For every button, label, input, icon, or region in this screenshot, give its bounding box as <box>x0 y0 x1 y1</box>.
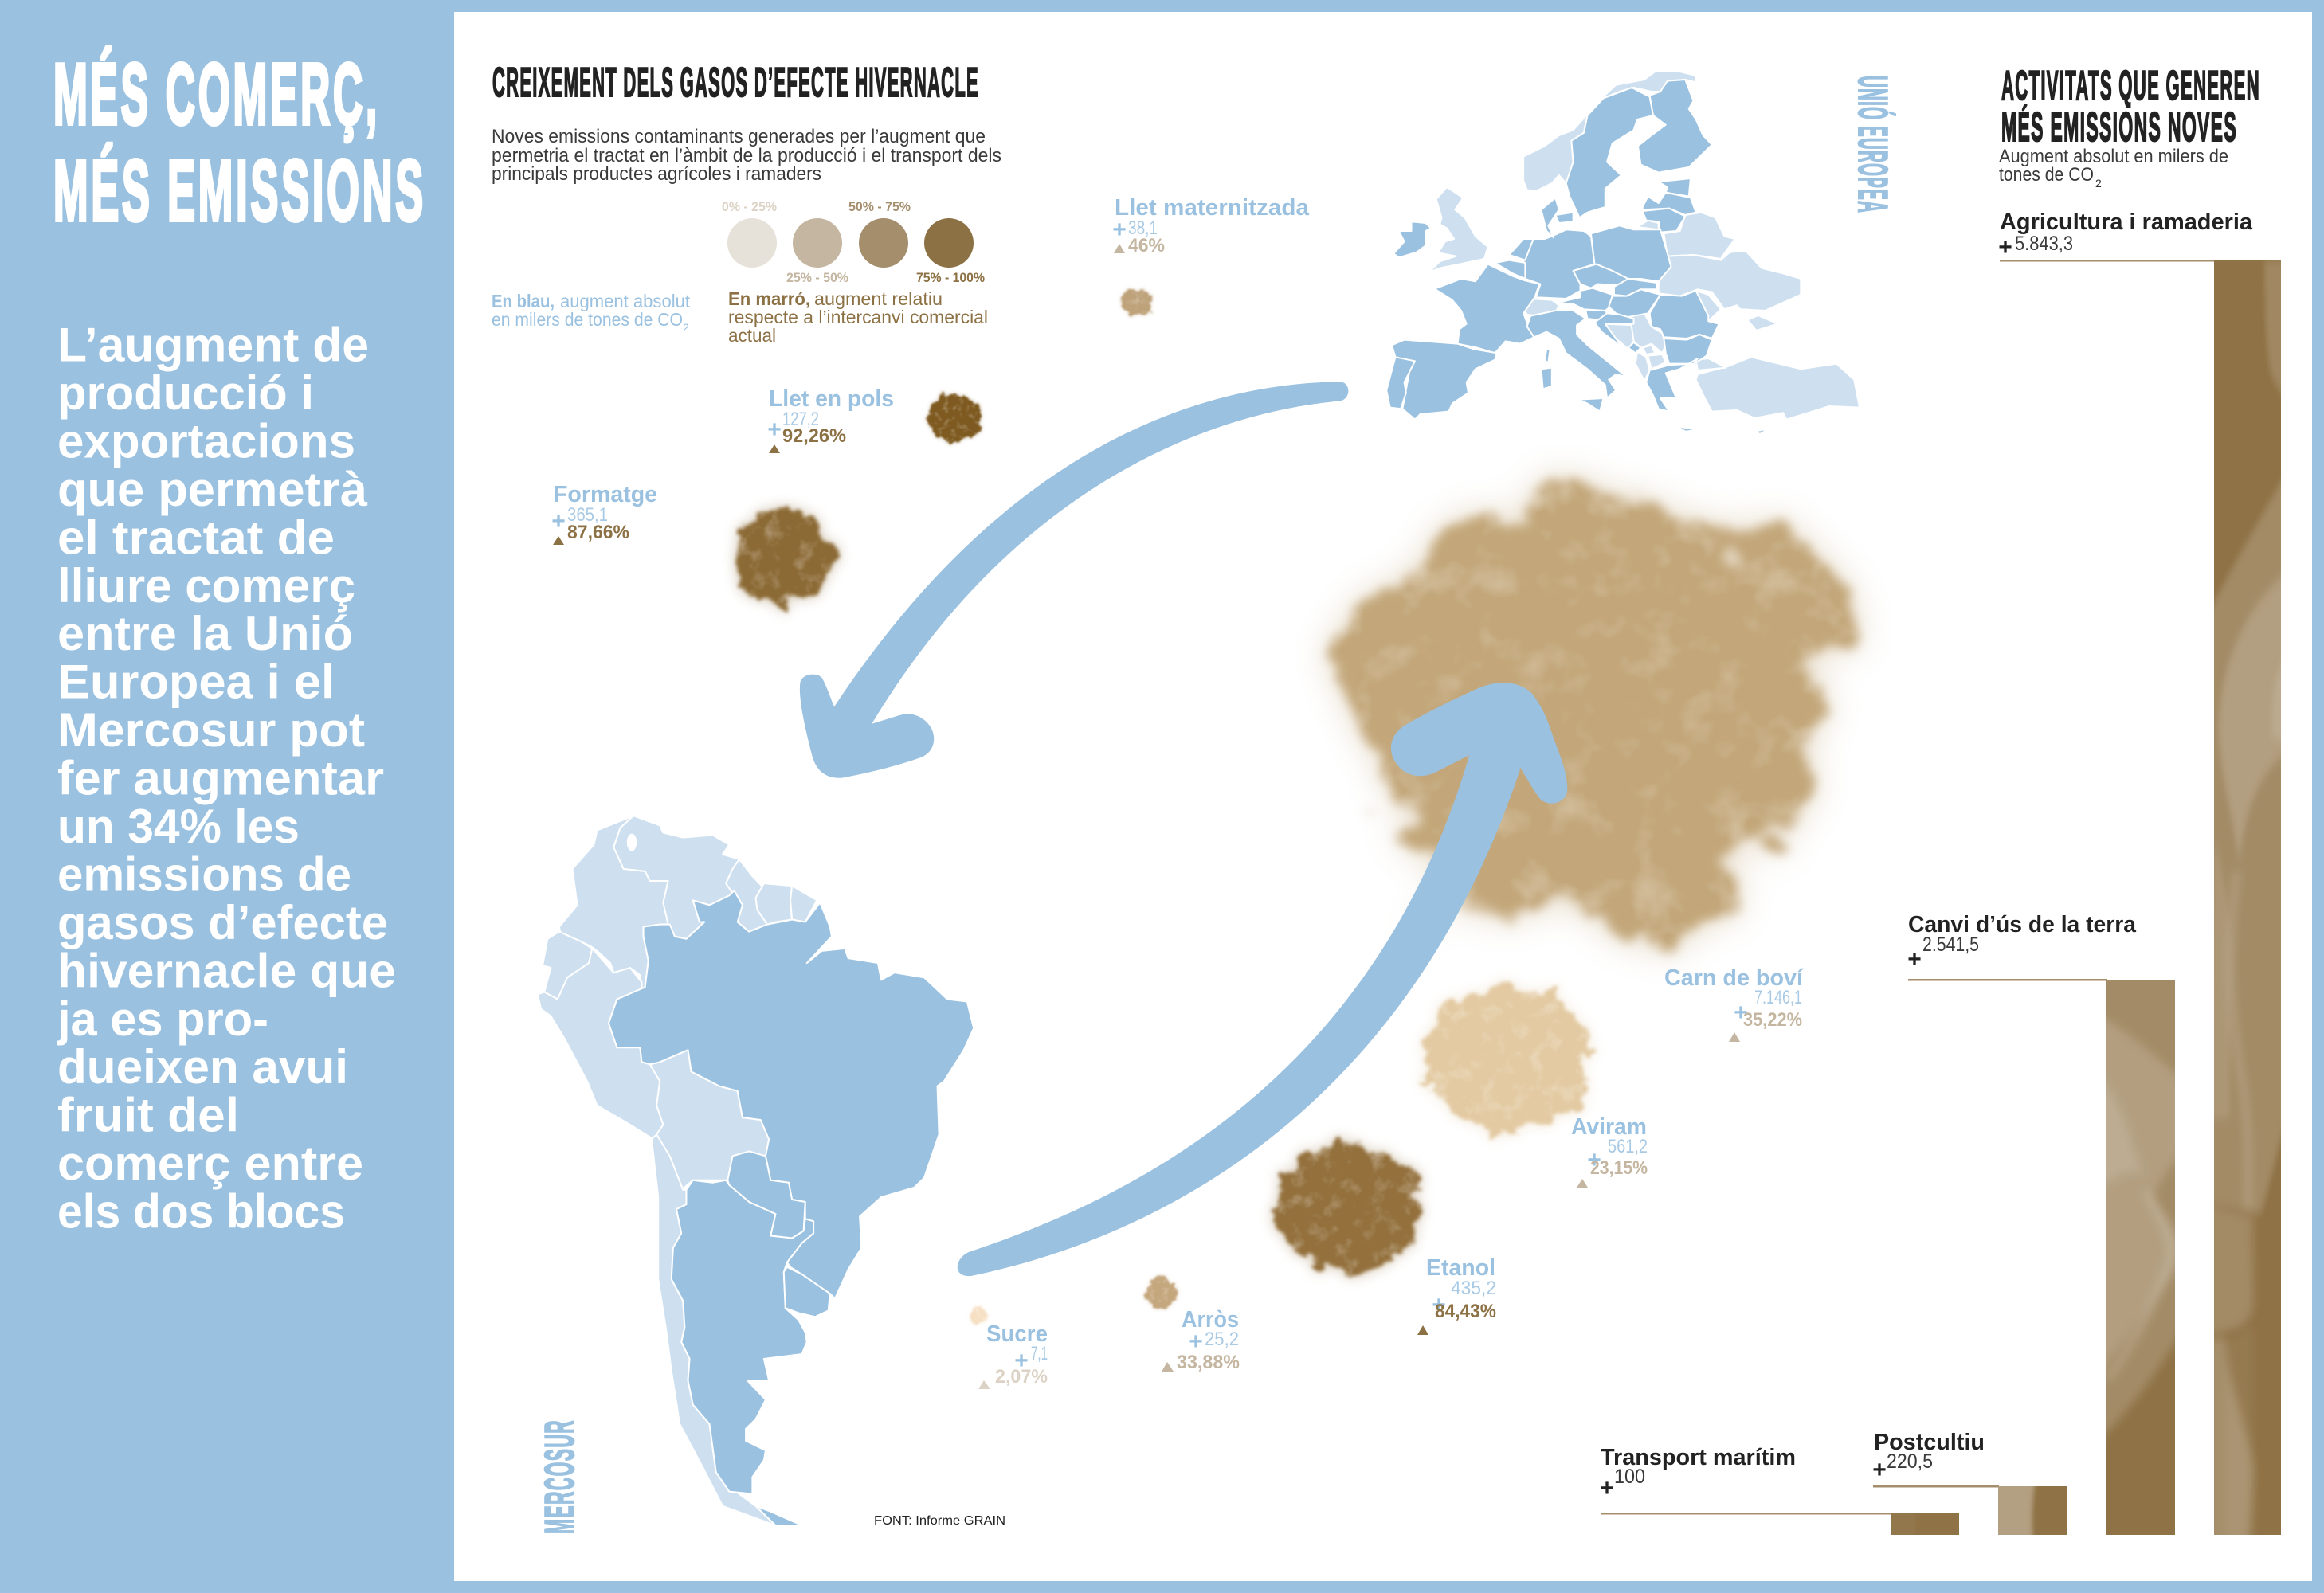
product label: Formatge: 365,1 <box>567 504 608 526</box>
intro paragraph: hivernacle que <box>57 944 396 997</box>
product label: Llet maternitzada <box>1112 195 1310 256</box>
emission cloud: Aviram <box>1426 986 1590 1133</box>
right subheading <box>1999 146 2228 190</box>
bar: Postcultiu: Postcultiu <box>1874 1430 1985 1455</box>
product label: Llet maternitzada: Llet maternitzada <box>1115 195 1310 221</box>
legend note: brown: actual <box>728 325 776 346</box>
bar: Postcultiu: + <box>1872 1457 1887 1483</box>
bar: Agricultura i ramaderia <box>1998 209 2289 1544</box>
product label: Aviram: 23,15% <box>1590 1157 1648 1179</box>
bar: Transport marítim: 100 <box>1614 1466 1645 1488</box>
intro paragraph: dueixen avui <box>57 1040 348 1094</box>
product label: Carn de boví: 7.146,1 <box>1754 987 1802 1008</box>
product label: Etanol: + <box>1432 1292 1446 1318</box>
product label: Formatge <box>551 482 657 545</box>
intro paragraph: gasos d’efecte <box>57 896 388 949</box>
bar: Canvi d'ús de la terra: + <box>1907 946 1922 973</box>
intro paragraph: Europea i el <box>57 656 335 709</box>
legend note: brown: augment relatiu <box>814 288 943 309</box>
legend note: brown: En marró, <box>728 288 810 309</box>
bar: Canvi d'ús de la terra: Canvi d’ús de la terra <box>1908 912 2137 937</box>
product label: Llet en pols: 127,2 <box>782 409 819 430</box>
emission cloud: Carn de boví <box>1334 494 1840 936</box>
product label: Aviram: 561,2 <box>1608 1136 1648 1157</box>
bar: Postcultiu: 220,5 <box>1887 1450 1933 1473</box>
product label: Formatge: + <box>551 508 566 534</box>
bar: Agricultura i ramaderia: Agricultura i ramaderia <box>2000 209 2253 235</box>
intro paragraph: emissions de <box>57 847 351 902</box>
product label: Arròs <box>1162 1307 1240 1373</box>
product label: Llet en pols: Llet en pols <box>769 386 894 412</box>
product label: Aviram: + <box>1587 1147 1601 1173</box>
product label: Carn de boví: 35,22% <box>1743 1009 1802 1031</box>
product label: Carn de boví: Carn de boví <box>1664 965 1804 991</box>
product label: Arròs: 33,88% <box>1177 1352 1240 1373</box>
product label: Etanol: 435,2 <box>1451 1278 1496 1299</box>
arrow: Mercosur to Europe <box>958 683 1567 1276</box>
intro paragraph: ja es pro- <box>57 992 268 1046</box>
bar: Postcultiu <box>1873 1433 2067 1535</box>
emission cloud: Etanol <box>1276 1141 1420 1272</box>
intro paragraph: producció i <box>57 366 314 420</box>
intro paragraph: L’augment de <box>57 319 369 371</box>
intro paragraph: fruit del <box>57 1089 239 1142</box>
intro paragraph: que permetrà <box>57 463 368 516</box>
right heading <box>2001 63 2260 151</box>
product label: Arròs: Arròs <box>1182 1307 1239 1333</box>
chart description <box>492 126 1001 185</box>
product label: Sucre: Sucre <box>986 1321 1048 1347</box>
legend note: blue: 2 <box>683 321 689 334</box>
intro paragraph: exportacions <box>57 414 355 468</box>
product label: Formatge: Formatge <box>554 482 657 507</box>
legend note: brown: respecte a l’intercanvi comercial <box>728 307 988 327</box>
bar: Canvi d'ús de la terra: 2.541,5 <box>1922 933 1979 956</box>
bar: Canvi d'ús de la terra <box>1907 912 2187 1535</box>
product label: Formatge: 87,66% <box>567 522 629 543</box>
product label: Etanol: 84,43% <box>1435 1301 1496 1322</box>
product label: Carn de boví: + <box>1734 1000 1748 1026</box>
intro paragraph: fer augmentar <box>57 752 384 804</box>
text: UNIÓ EUROPEA <box>1849 76 1895 213</box>
legend: relative increase scale: 50% - 75% <box>848 199 911 214</box>
emission cloud: Sucre <box>970 1307 987 1325</box>
intro paragraph: un 34% les <box>57 800 300 853</box>
text: MERCOSUR <box>537 1419 583 1534</box>
product label: Arròs: + <box>1189 1329 1203 1355</box>
emission cloud: Llet maternitzada <box>1122 288 1152 317</box>
right subheading: Augment absolut en milers de <box>1999 146 2228 167</box>
product label: Sucre: 2,07% <box>995 1366 1048 1388</box>
product label: Etanol: Etanol <box>1426 1255 1495 1281</box>
bar: Transport marítim: + <box>1600 1475 1614 1501</box>
arrow: Europe to Mercosur <box>800 382 1348 778</box>
main title: MÉS COMERÇ, <box>53 46 380 143</box>
product label: Llet maternitzada: 46% <box>1128 235 1165 256</box>
intro paragraph: Mercosur pot <box>57 703 365 757</box>
product label: Carn de boví <box>1664 965 1804 1042</box>
right subheading: 2 <box>2095 177 2102 190</box>
intro paragraph <box>57 319 396 1238</box>
legend: relative increase scale: 75% - 100% <box>916 270 985 285</box>
emission cloud: Arròs <box>1146 1278 1178 1309</box>
map: Europe <box>1386 72 1860 434</box>
product label: Aviram <box>1571 1114 1648 1188</box>
legend note: blue <box>492 291 691 334</box>
intro paragraph: comerç entre <box>57 1137 363 1190</box>
legend: relative increase scale <box>722 199 985 285</box>
legend note: blue: En blau, <box>492 291 555 311</box>
product label: Sucre: + <box>1014 1348 1029 1374</box>
right subheading: tones de CO <box>1999 164 2094 186</box>
emission cloud: Llet en pols <box>928 394 981 442</box>
intro paragraph: els dos blocs <box>57 1185 345 1238</box>
product label: Aviram: Aviram <box>1571 1114 1647 1140</box>
legend: relative increase scale: 0% - 25% <box>722 199 777 214</box>
bar: Transport marítim <box>1600 1445 1959 1535</box>
text: MÉS EMISSIONS <box>53 142 426 239</box>
product label: Sucre <box>978 1321 1048 1389</box>
product label: Arròs: 25,2 <box>1205 1329 1239 1350</box>
product label: Llet en pols: 92,26% <box>782 425 846 447</box>
product label: Llet maternitzada: 38,1 <box>1128 217 1158 239</box>
source: FONT: Informe GRAIN <box>874 1514 1005 1528</box>
map: South America <box>538 816 974 1525</box>
bar: Agricultura i ramaderia: + <box>1998 234 2012 260</box>
bar: Transport marítim: Transport marítim <box>1601 1445 1796 1470</box>
product label: Llet en pols <box>767 386 894 453</box>
bar: Agricultura i ramaderia: 5.843,3 <box>2015 233 2073 255</box>
emission cloud: Formatge <box>733 512 835 605</box>
intro paragraph: lliure comerç <box>57 559 355 613</box>
white content panel <box>454 12 2312 1581</box>
intro paragraph: el tractat de <box>57 511 335 564</box>
legend note: blue: en milers de tones de CO <box>492 309 683 330</box>
chart description: permetria el tractat en l’àmbit de la producció i el transport dels <box>492 145 1001 166</box>
intro paragraph: entre la Unió <box>57 607 353 660</box>
product label: Llet maternitzada: + <box>1112 217 1127 243</box>
legend: relative increase scale: 25% - 50% <box>786 270 848 285</box>
product label: Sucre: 7,1 <box>1031 1343 1048 1364</box>
product label: Etanol <box>1417 1255 1496 1335</box>
chart description: Noves emissions contaminants generades per l’augment que <box>492 126 986 147</box>
product label: Llet en pols: + <box>767 417 782 443</box>
chart description: principals productes agrícoles i ramaders <box>492 163 821 185</box>
text: CREIXEMENT DELS GASOS D’EFECTE HIVERNACLE <box>492 60 979 106</box>
main title <box>53 46 426 239</box>
legend note: blue: augment absolut <box>560 291 691 311</box>
legend note: brown <box>728 288 988 346</box>
